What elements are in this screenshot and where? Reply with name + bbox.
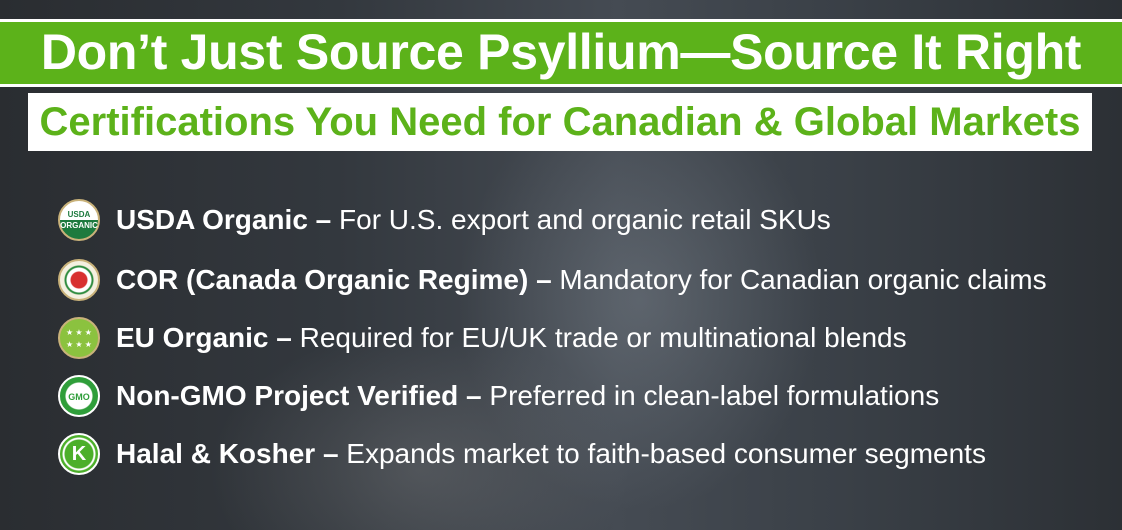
item: USDA Organic xyxy=(58,199,831,241)
icon: USDA xyxy=(58,199,100,241)
title band: Don’t Just Source Psyllium—Source It Right xyxy=(41,24,1081,80)
icon: USDA: ORGANIC xyxy=(60,221,98,230)
item: USDA Organic: USDA Organic – For U.S. export and organic retail SKUs xyxy=(116,204,831,235)
icon: EU leaf: ★ ★ ★ xyxy=(66,340,92,349)
subtitle box: Certifications You Need for Canadian & Global Markets xyxy=(40,100,1080,144)
icon: Kosher K: K xyxy=(72,443,86,465)
icon: Canada organic xyxy=(58,259,100,301)
icon: USDA: USDA xyxy=(68,210,90,219)
item: COR: COR (Canada Organic Regime) – Mandatory for Canadian organic claims xyxy=(116,264,1047,295)
icon: Non-GMO xyxy=(58,375,100,417)
icon: EU leaf xyxy=(58,317,100,359)
item: EU Organic: EU Organic – Required for EU/UK trade or multinational blends xyxy=(116,322,907,353)
item: Halal & Kosher: Halal & Kosher – Expands market to faith-based consumer segments xyxy=(116,438,986,469)
icon: EU leaf: ★ ★ ★ xyxy=(66,328,92,337)
item: COR xyxy=(58,259,1047,301)
item: EU Organic xyxy=(58,317,907,359)
icon: Kosher K xyxy=(58,433,100,475)
icon: Non-GMO: GMO xyxy=(68,392,90,402)
item: Non-GMO xyxy=(58,375,939,417)
item: Non-GMO: Non-GMO Project Verified – Preferred in clean-label formulations xyxy=(116,380,939,411)
item: Halal & Kosher xyxy=(58,433,986,475)
